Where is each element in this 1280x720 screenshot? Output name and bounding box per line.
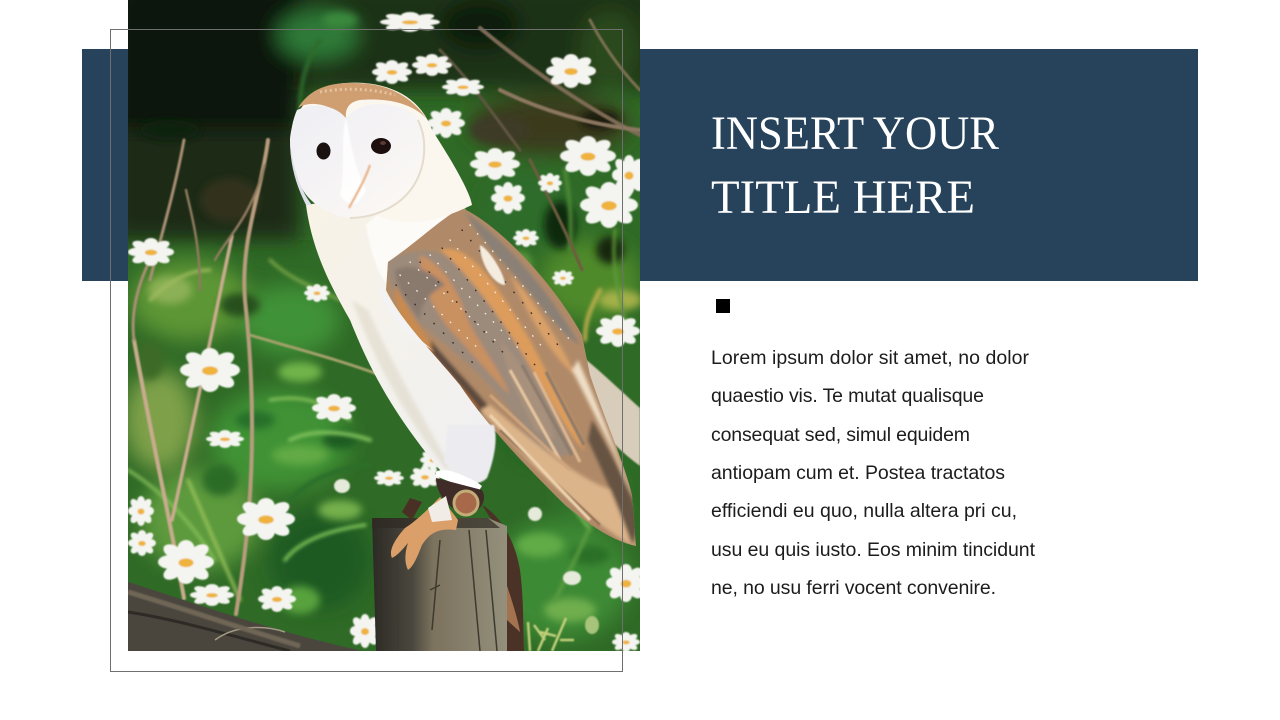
daisies (128, 12, 646, 652)
body text: efficiendi eu quo, nulla altera pri cu, (711, 500, 1017, 522)
small plant near post (528, 618, 574, 651)
body text (711, 347, 1036, 599)
owl body (306, 190, 491, 485)
photo: barn owl on a post among daisies (110, 0, 660, 652)
owl wing (380, 200, 640, 550)
log (128, 582, 362, 651)
white inner wing feather (376, 275, 436, 352)
body text: antiopam cum et. Postea tractatos (711, 462, 1005, 484)
body text: usu eu quis iusto. Eos minim tincidunt (711, 539, 1036, 561)
body text: quaestio vis. Te mutat qualisque (711, 385, 984, 407)
strap (482, 505, 524, 651)
owl tail (587, 359, 640, 466)
body text: ne, no usu ferri vocent convenire. (711, 577, 996, 599)
owl talons (391, 497, 458, 570)
owl leg (444, 425, 496, 483)
body text: consequat sed, simul equidem (711, 424, 970, 446)
grass blades (128, 40, 625, 600)
foliage mottling (136, 12, 642, 622)
white neck ruff (366, 208, 466, 282)
title (711, 107, 999, 224)
thin outline frame (110, 30, 622, 672)
dry stems (133, 20, 640, 614)
owl eyes (316, 142, 330, 160)
black square bullet (716, 299, 730, 313)
title: INSERT YOUR (711, 107, 999, 160)
jess ring (454, 491, 478, 515)
flight feather stripes (490, 365, 600, 525)
blurred foliage background (110, 0, 660, 640)
title: TITLE HERE (711, 171, 975, 224)
owl facial disc (290, 105, 376, 218)
wing speckles (396, 225, 570, 365)
navy title band (82, 49, 1198, 281)
fence post (372, 518, 507, 651)
owl head (290, 83, 472, 222)
body text: Lorem ipsum dolor sit amet, no dolor (711, 347, 1030, 369)
